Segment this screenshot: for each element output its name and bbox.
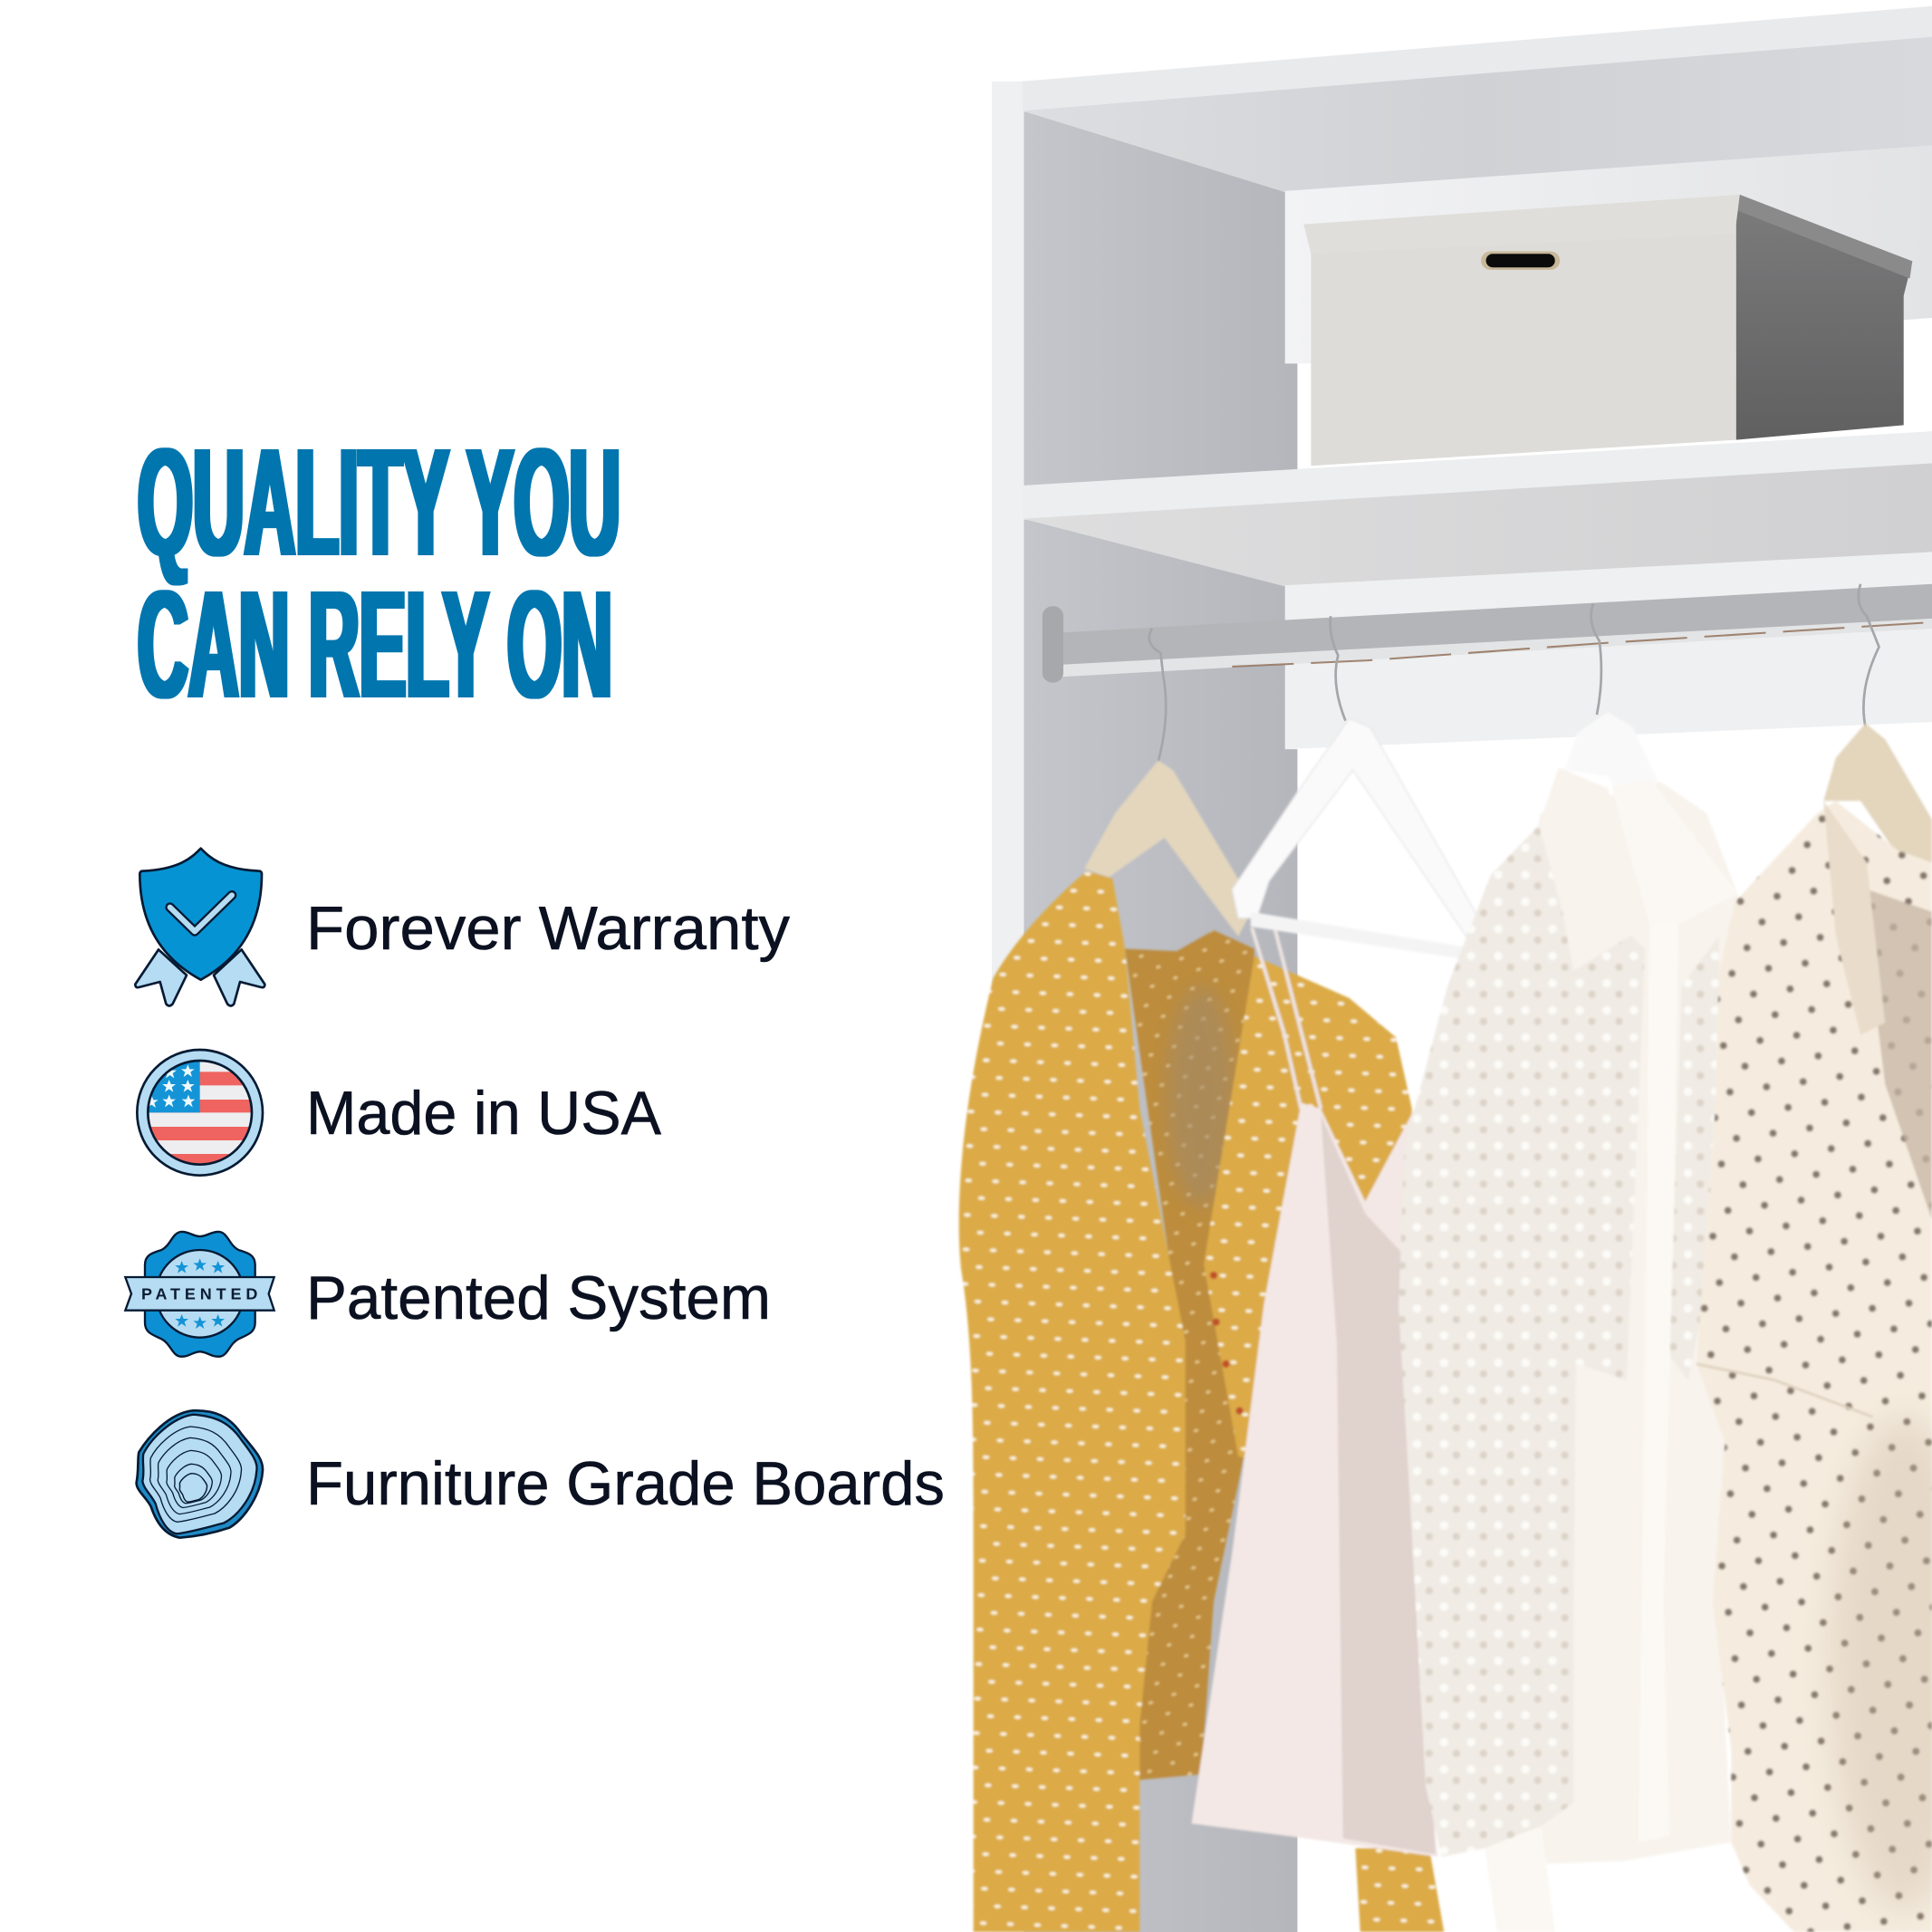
hanging rod <box>1043 584 1932 762</box>
badge label: PATENTED <box>141 1284 257 1302</box>
cardigan inner <box>1125 930 1254 1781</box>
icon: patented badge <box>125 1232 274 1357</box>
cardigan hem <box>1355 1848 1444 1932</box>
polka sleeve hem <box>1697 1364 1873 1417</box>
text: QUALITY YOU <box>138 417 620 589</box>
storage box <box>1303 195 1912 466</box>
polka shirt inner shadow <box>1860 887 1932 1220</box>
text: CAN RELY ON <box>138 559 612 731</box>
polka dot shirt <box>1697 801 1932 1932</box>
lace sleeve <box>1399 825 1577 1857</box>
icon: USA flag <box>137 1050 263 1176</box>
icon: wood rings <box>137 1410 263 1538</box>
cardigan sleeve <box>959 871 1186 1932</box>
camisole straps <box>1252 928 1321 1109</box>
white hanger <box>1232 718 1478 961</box>
cardigan inner shadow <box>1167 985 1235 1207</box>
second white hanger <box>1565 712 1690 862</box>
pink camisole <box>1191 1072 1438 1857</box>
cuff <box>1485 1826 1555 1932</box>
polka collar <box>1823 801 1885 1035</box>
collar <box>1539 767 1649 971</box>
polka shirt lower shade <box>1830 1417 1932 1910</box>
yellow cardigan right panel <box>1204 956 1412 1478</box>
clothes group <box>959 712 1932 1932</box>
label: furniture grade boards: Furniture Grade Boards <box>306 1449 945 1518</box>
feature labels <box>306 894 945 1518</box>
lace right panel <box>1669 937 1719 1380</box>
camisole shadow <box>1321 1115 1436 1854</box>
wood hanger right <box>1823 724 1932 906</box>
lace front <box>1528 838 1645 1380</box>
label: forever warranty: Forever Warranty <box>306 894 790 963</box>
wood hanger left <box>1084 760 1254 937</box>
label: patented system: Patented System <box>306 1264 771 1332</box>
wardrobe frame <box>992 6 1932 1932</box>
cardigan buttons <box>1210 1272 1244 1415</box>
hanger hooks <box>1149 584 1879 762</box>
collar right <box>1611 779 1737 927</box>
placket <box>1639 918 1678 1842</box>
icon: warranty shield <box>135 849 264 1005</box>
label: made in usa: Made in USA <box>306 1079 662 1148</box>
heading <box>138 417 620 731</box>
cream shirt body <box>1478 783 1744 1864</box>
photo: wardrobe with hanging clothes <box>959 6 1932 1932</box>
